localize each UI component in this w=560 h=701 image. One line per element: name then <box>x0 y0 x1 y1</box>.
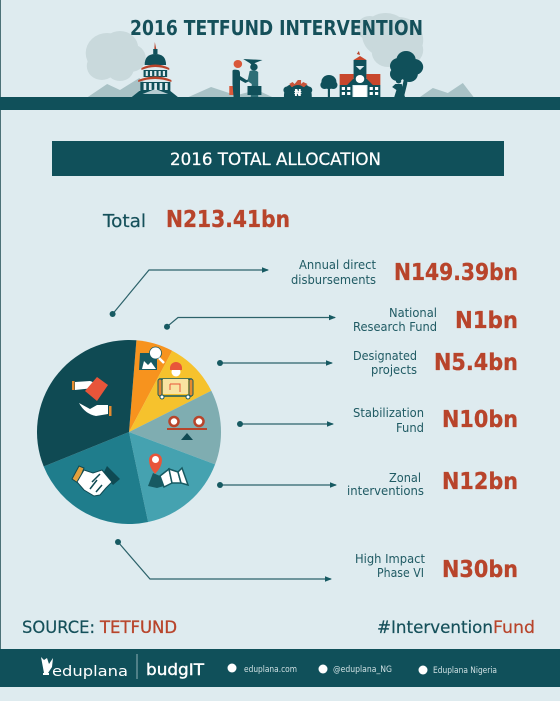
label: high impact phase VI: Phase VI <box>377 566 424 580</box>
total figure <box>102 205 290 233</box>
icon: magnifier over chart <box>139 347 164 370</box>
line: high impact phase VI <box>118 542 331 579</box>
pie chart <box>37 340 221 524</box>
label: designated projects: N5.4bn <box>434 348 518 376</box>
hashtag: Fund <box>493 618 535 638</box>
label: stabilization fund: Stabilization <box>353 406 424 420</box>
icon: big tree with figure <box>390 51 423 97</box>
line: stabilization fund <box>240 423 333 425</box>
label: annual direct disbursements: N149.39bn <box>394 258 518 286</box>
icon: handshake <box>72 466 120 496</box>
footer bar <box>0 649 560 687</box>
label: national research fund <box>353 306 518 334</box>
header illustration <box>86 13 474 99</box>
icon: money bags: ₦ <box>294 87 302 99</box>
label: national research fund: Research Fund <box>353 320 437 334</box>
title: 2016 TETFUND INTERVENTION <box>130 16 423 40</box>
connector lines <box>113 270 336 579</box>
clouds <box>86 13 423 81</box>
line: zonal interventions <box>220 484 336 486</box>
social: website <box>228 664 297 675</box>
label: national research fund: National <box>389 306 437 320</box>
total figure: Total <box>102 212 146 232</box>
icon: graduate shaking hands <box>229 59 262 97</box>
label: designated projects: projects <box>371 363 417 377</box>
label: designated projects: Designated <box>353 349 417 363</box>
line: national research fund <box>167 318 335 327</box>
line: annual direct disbursements <box>113 270 268 314</box>
label: annual direct disbursements: disbursements <box>291 273 376 287</box>
label: high impact phase VI: N30bn <box>442 555 518 583</box>
label: annual direct disbursements <box>291 258 518 287</box>
hashtag: #Intervention <box>377 618 493 638</box>
connector dots <box>110 311 243 545</box>
label: zonal interventions: Zonal <box>389 471 421 485</box>
label: national research fund: N1bn <box>455 306 518 334</box>
label: stabilization fund: N10bn <box>442 405 518 433</box>
social: facebook: Eduplana Nigeria <box>433 666 497 676</box>
label: zonal interventions: N12bn <box>442 467 518 495</box>
icon: hands giving money <box>72 377 112 416</box>
label: stabilization fund: Fund <box>396 421 424 435</box>
label: annual direct disbursements: Annual direct <box>299 258 376 272</box>
label: high impact phase VI: High Impact <box>355 552 425 566</box>
icon: balance scale <box>167 417 207 440</box>
mountains <box>88 78 474 97</box>
label: designated projects <box>353 348 518 377</box>
icon: capitol building <box>132 42 178 97</box>
logo: eduplana: eduplana <box>52 664 128 680</box>
icon: money bags <box>283 80 312 99</box>
logo: eduplana <box>41 657 128 680</box>
ground bar <box>0 97 560 110</box>
icon: map and pin <box>148 454 188 488</box>
social: twitter: @eduplana_NG <box>333 665 392 675</box>
source <box>22 618 177 638</box>
heading banner: 2016 total allocation <box>52 141 504 176</box>
source: SOURCE: <box>22 618 95 638</box>
label: zonal interventions <box>347 467 518 498</box>
label: stabilization fund <box>353 405 518 435</box>
heading banner: 2016 total allocation: 2016 TOTAL ALLOCATION <box>170 150 381 169</box>
source: TETFUND <box>99 618 177 638</box>
icon: small tree <box>320 75 337 97</box>
label: high impact phase VI <box>355 552 518 583</box>
label: zonal interventions: interventions <box>347 484 424 498</box>
total figure: N213.41bn <box>166 205 290 233</box>
logo: budgIT: budgIT <box>146 660 204 679</box>
line: designated projects <box>220 362 332 364</box>
icon: school building <box>340 51 380 97</box>
social: website: eduplana.com <box>244 665 297 675</box>
icon: engineer with blueprint <box>158 362 193 399</box>
